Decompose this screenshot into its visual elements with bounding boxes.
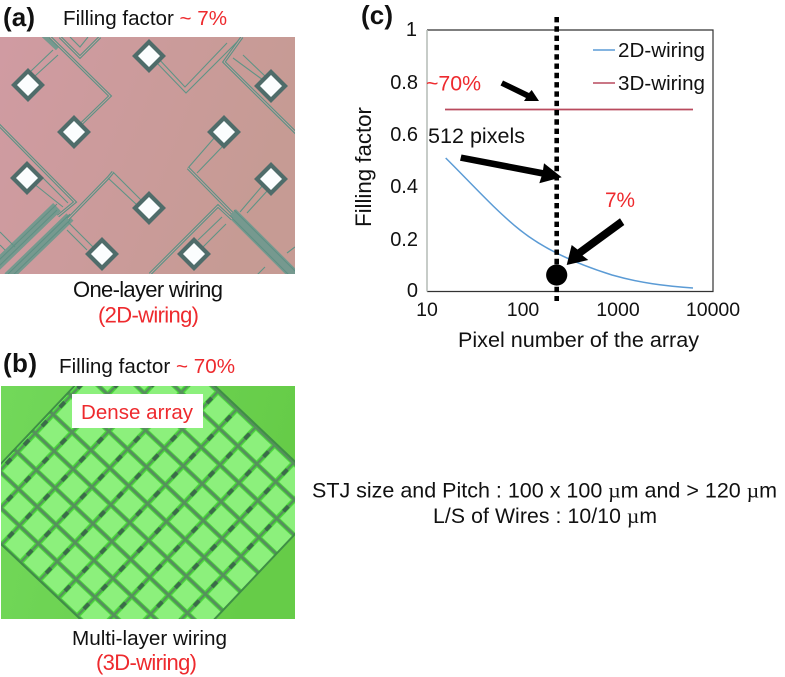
- caption: 2D-wiring: (2D-wiring): [98, 302, 199, 328]
- legend: 2D-wiring: [618, 39, 705, 62]
- x axis tick labels: 10: [416, 299, 438, 321]
- caption: multi-layer wiring: Multi-layer wiring: [72, 627, 227, 650]
- y axis tick labels: [390, 19, 418, 302]
- text block: line and space of wires: L/S of Wires : 10/10 µm: [433, 504, 657, 528]
- y axis tick labels: 0.6: [390, 124, 418, 146]
- heading: filling factor 7%: Filling factor ~ 7%: [63, 7, 227, 30]
- annotation: 7%: 7%: [605, 189, 635, 212]
- panel label (a): (a): [3, 2, 35, 32]
- data point: 7%: [546, 264, 567, 286]
- chart: filling factor vs pixel number: [351, 17, 740, 352]
- y axis tick labels: 0.4: [390, 176, 418, 198]
- y axis tick labels: 1: [406, 19, 417, 41]
- label: dense array: [72, 394, 203, 428]
- y axis tick labels: 0.8: [390, 72, 418, 94]
- arrow: to data point: [567, 218, 624, 265]
- x axis tick labels: 100: [507, 299, 539, 321]
- y axis title: Filling factor: [351, 106, 376, 227]
- x axis title: Pixel number of the array: [458, 327, 699, 352]
- plot frame: [427, 30, 713, 292]
- wiring traces: [0, 35, 300, 282]
- arrow: to 512 pixel line: [460, 154, 562, 183]
- label: dense array: Dense array: [81, 401, 194, 424]
- annotation: 512 pixels: 512 pixels: [428, 124, 525, 148]
- text block: STJ size and pitch: STJ size and Pitch : 100 x 100 µm and > 120 µm: [312, 478, 777, 502]
- dense pixel array: [1, 386, 295, 619]
- x axis tick labels: 1000: [596, 299, 640, 321]
- heading: filling factor 70%: Filling factor ~ 70%: [59, 355, 235, 378]
- series: 2D-wiring: [446, 158, 693, 288]
- y axis tick labels: 0.2: [390, 229, 418, 251]
- vertical dotted line at 512 pixels: [554, 17, 559, 301]
- panel label (b): (b): [3, 348, 37, 378]
- STJ pads: [13, 42, 285, 268]
- series: 3D-wiring: [445, 108, 693, 110]
- x axis tick labels: 10000: [686, 299, 740, 321]
- micrograph: one-layer wiring: [0, 35, 300, 282]
- legend: [593, 39, 705, 95]
- caption: one-layer wiring: One-layer wiring: [73, 277, 223, 302]
- x axis tick labels: [416, 299, 740, 321]
- legend: 3D-wiring: [618, 72, 705, 95]
- annotation: about 70%: ~70%: [426, 72, 481, 96]
- panel label (c): (c): [361, 0, 393, 30]
- caption: 3D-wiring: (3D-wiring): [96, 650, 197, 675]
- arrow: to 3D-wiring line: [500, 80, 539, 101]
- y axis tick labels: 0: [407, 280, 418, 302]
- micrograph: multi-layer wiring: [1, 386, 295, 619]
